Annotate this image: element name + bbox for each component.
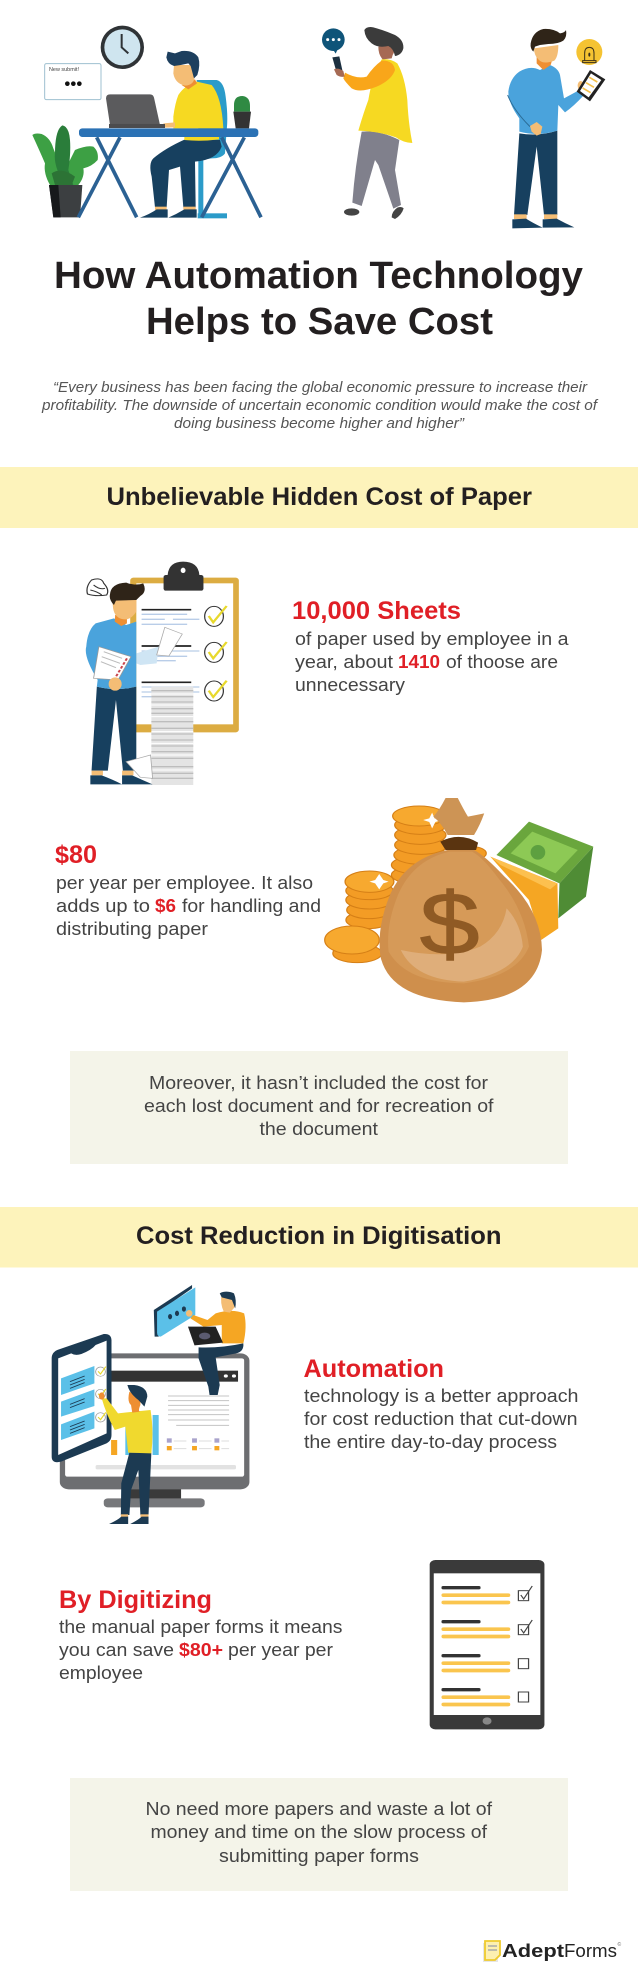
desk [78,128,261,217]
stat: $80: distributing paper [56,919,208,939]
title: How Automation Technology [54,255,583,297]
stat: 10,000 sheets: 10,000 Sheets [292,597,461,625]
section heading: digitisation: Cost Reduction in Digitisation [136,1222,502,1250]
stat: by digitizing: you can save [59,1640,174,1660]
seated worker with laptop [186,1292,246,1395]
callout: new submit [45,64,101,100]
logo: AdeptForms: Forms [564,1940,617,1961]
logo: AdeptForms: © [618,1941,622,1948]
logo: AdeptForms: Adept [502,1940,564,1961]
stat: by digitizing [59,1586,342,1683]
title: Helps to Save Cost [146,301,493,343]
illustration: money bag, coins and cash [325,798,593,1002]
section heading: digitisation [0,1207,638,1268]
desktop monitor [60,1353,249,1507]
section heading: hidden cost of paper [0,467,638,528]
icon: chair [197,80,227,218]
callout: lost documents: Moreover, it hasn’t included the cost for [149,1073,488,1093]
callout: lost documents: the document [260,1119,378,1139]
seated worker [140,51,223,218]
illustration: two standing workers [322,27,605,228]
icon: tablet with checklist [430,1560,544,1729]
stat: by digitizing: the manual paper forms it means [59,1617,342,1637]
intro quote: “Every business has been facing the global economic pressure to increase their [53,380,588,396]
callout: no more paper: submitting paper forms [219,1846,419,1866]
icon: wall clock [101,26,144,69]
stat: automation: the entire day-to-day process [304,1432,557,1452]
stat: $80: for handling and [182,896,321,916]
callout: no more paper: money and time on the slow process of [150,1822,488,1842]
intro quote: profitability. The downside of uncertain economic condition would make the cost of [41,398,599,414]
icon: potted plant [32,125,98,217]
stat: by digitizing: per year per [228,1640,333,1660]
money bag [380,798,542,1002]
floating tablet [154,1285,195,1337]
stat: $80: $80 [55,841,97,869]
section heading: hidden cost of paper: Unbelievable Hidden Cost of Paper [106,483,532,511]
stat: 10,000 sheets [292,597,570,695]
icon: scribble [87,579,108,596]
intro quote [41,380,599,432]
standing man with tablet [508,29,605,228]
callout: new submit: New submit! [49,67,79,73]
stat: by digitizing: By Digitizing [59,1586,212,1614]
callout: no more paper: No need more papers and waste a lot of [146,1799,493,1819]
stat: $80 [55,841,321,939]
illustration: worker at desk [32,26,261,218]
stat: by digitizing: employee [59,1663,143,1683]
cash bundle [490,822,593,940]
stat: 10,000 sheets: of thoose are [446,652,558,672]
callout: lost documents [70,1051,568,1164]
paper stack [151,687,193,785]
smartphone with form cards [52,1334,111,1462]
stat: 10,000 sheets: year, about [295,652,393,672]
intro quote: doing business become higher and higher” [174,416,465,432]
coin stacks [325,806,486,963]
illustration: man with clipboard and paper stack [86,562,239,785]
stat: $80: adds up to [56,896,150,916]
standing worker [99,1385,152,1524]
worker holding papers [86,583,182,784]
stat: 10,000 sheets: 1410 [398,652,440,672]
stat: 10,000 sheets: unnecessary [295,675,405,695]
stat: 10,000 sheets: of paper used by employee in a [295,629,570,649]
callout: lost documents: each lost document and for recreation of [144,1096,495,1116]
stat: $80: $6 [155,896,176,916]
title [54,255,583,343]
clipboard [130,562,239,732]
stat: $80: per year per employee. It also [56,873,313,893]
icon: laptop [106,94,165,128]
stat: by digitizing: $80+ [179,1640,223,1660]
stat: automation: Automation [304,1355,444,1383]
stat: automation: for cost reduction that cut-down [304,1409,578,1429]
money bag: $ [420,874,480,973]
callout: no more paper [70,1778,568,1891]
illustration: automation on monitor and phone [52,1285,249,1524]
walking woman with phone [322,27,412,219]
icon: cactus [233,96,251,128]
stat: automation: technology is a better approach [304,1386,578,1406]
logo: AdeptForms [483,1940,622,1962]
stat: automation [304,1355,578,1452]
